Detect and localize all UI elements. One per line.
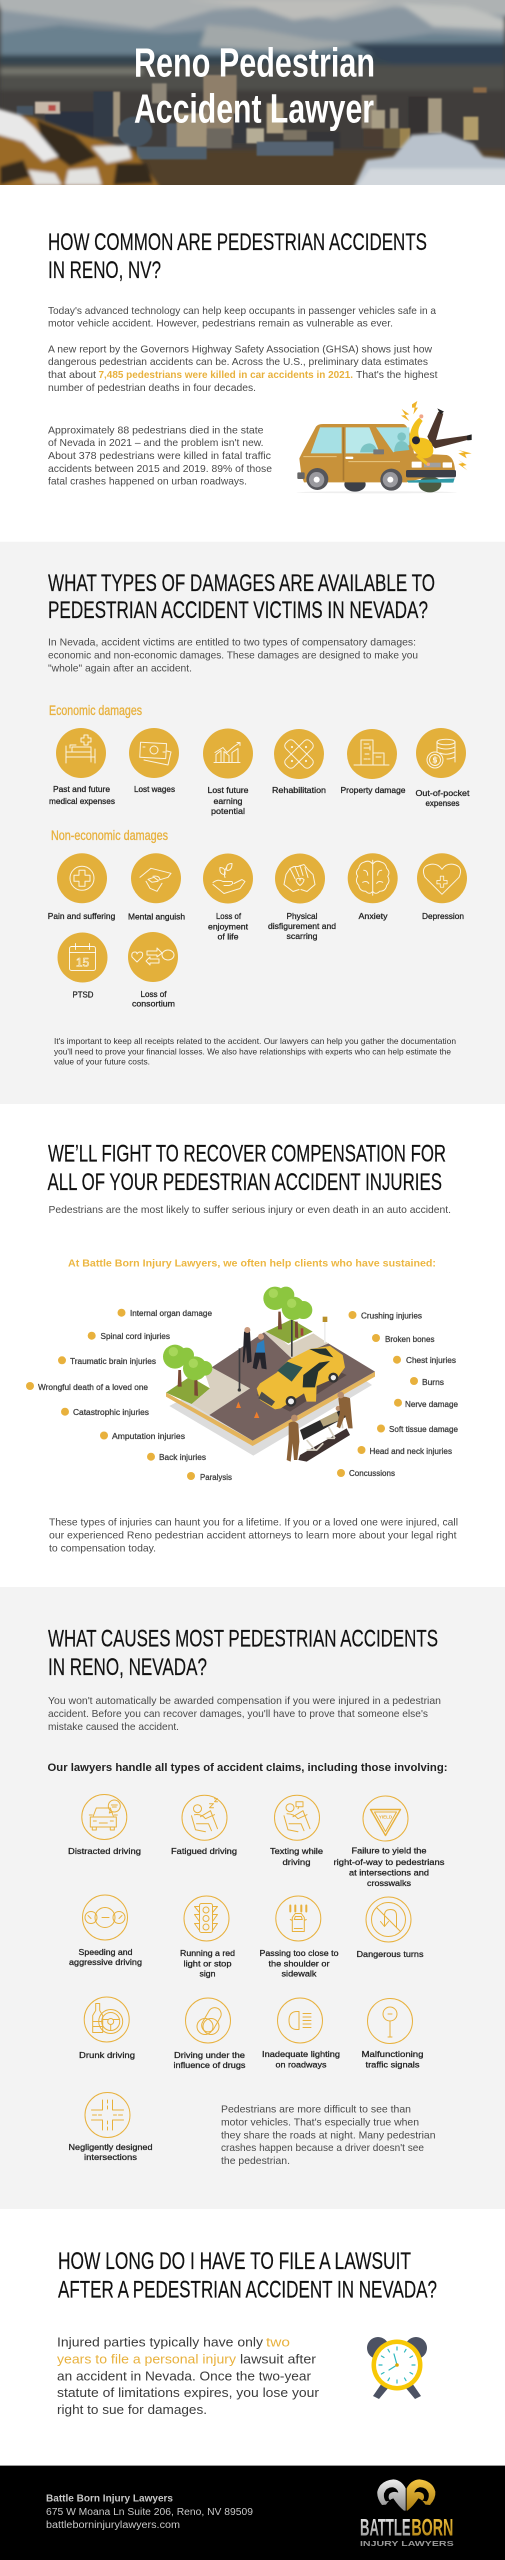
item: lost future earning potential: potential: [211, 807, 245, 816]
text block: intro: [48, 306, 436, 330]
text block: visibility note: they share the roads at night. Many pedestrian: [221, 2130, 436, 2142]
list: injuries left: Paralysis: [200, 1473, 232, 1482]
list: injuries right: Head and neck injuries: [370, 1447, 452, 1456]
text block: contact details: Battle Born Injury Lawyers: [46, 2494, 173, 2505]
text block: damages intro: economic and non-economic damages. These damages are designed to make you: [48, 650, 418, 662]
logo: Battle Born Injury Lawyers: BATTLE: [360, 2515, 411, 2542]
text block: statute of limitations: an accident in Nevada. Once the two-year: [57, 2368, 312, 2383]
item: physical disfigurement and scarring: disfigurement and: [268, 922, 336, 931]
item: mental anguish: Mental anguish: [128, 912, 185, 922]
panel: how common are pedestrian accidents: [48, 229, 472, 493]
item: speeding and aggressive driving: [69, 1895, 142, 1967]
text block: causes intro: [48, 1696, 441, 1733]
text block: intro: motor vehicle accident. However, pedestrians remain as vulnerable as ever.: [48, 319, 393, 330]
item: past and future medical expenses: medical expenses: [49, 797, 115, 806]
text block: injuries closing: to compensation today.: [49, 1544, 156, 1554]
panel: footer: [0, 2465, 505, 2560]
list: injuries right: Broken bones: [385, 1335, 434, 1344]
item: dangerous turns: Dangerous turns: [356, 1950, 424, 1959]
item: lost future earning potential: [203, 728, 253, 816]
text block: statute of limitations: right to sue for damages.: [57, 2402, 207, 2417]
item: running a red light: light or stop: [184, 1960, 232, 1968]
item: failure to yield: crosswalks: [367, 1879, 411, 1888]
text block: damages intro: In Nevada, accident victims are entitled to two types of compensatory damages:: [48, 638, 416, 649]
text block: Nevada statistics: [48, 425, 272, 488]
item: physical disfigurement and scarring: scarring: [286, 932, 318, 941]
heading: IN RENO, NV?: [48, 257, 161, 284]
logo: Battle Born Injury Lawyers: [360, 2479, 454, 2548]
item: mental anguish: [128, 853, 185, 922]
panel: hero photo banner: [0, 0, 505, 192]
item: lost wages: Lost wages: [134, 785, 175, 794]
list: injuries right: [337, 1311, 459, 1478]
panel: causes of accidents: [0, 1587, 505, 2209]
item: running a red light: sign: [200, 1970, 216, 1978]
text block: causes intro: You won't automatically be awarded compensation if you were injured in a pedestrian: [48, 1696, 441, 1707]
text block: damages intro: "whole" again after an accident.: [48, 664, 192, 674]
item: physical disfigurement and scarring: [268, 854, 336, 941]
heading: [48, 570, 435, 624]
list: injuries left: Back injuries: [159, 1453, 206, 1462]
item: inadequate lighting: Inadequate lighting: [262, 2050, 340, 2059]
list: injuries right: Crushing injuries: [361, 1312, 422, 1320]
item: loss of consortium: Loss of: [140, 990, 167, 999]
text block: Nevada statistics: Approximately 88 pedestrians died in the state: [48, 425, 264, 436]
item: lost future earning potential: Lost future: [208, 786, 249, 795]
item: driving under the influence of drugs: influence of drugs: [174, 2061, 246, 2070]
item: negligently designed intersections: [68, 2092, 153, 2162]
item: lost future earning potential: earning: [214, 797, 243, 806]
item: loss of enjoyment of life: Loss of: [216, 912, 242, 921]
item: driving under the influence of drugs: [174, 1998, 246, 2070]
item: property damage: Property damage: [340, 786, 406, 795]
text block: visibility note: the pedestrian.: [221, 2156, 290, 2167]
panel: filing deadline: [57, 2248, 437, 2417]
icon: alarm clock: [367, 2337, 427, 2399]
heading: [48, 1626, 438, 1681]
illustration: isometric accident scene: [163, 1287, 375, 1462]
item: passing too close: Passing too close to: [260, 1949, 339, 1958]
item: running a red light: Running a red: [180, 1949, 235, 1958]
text block: injuries closing: our experienced Reno pedestrian accident attorneys to learn more about your legal right: [49, 1530, 457, 1542]
text block: causes intro: accident. Before you can recover damages, you'll have to prove that someone else's: [48, 1709, 428, 1720]
text block: statute of limitations: years to file a personal injury: [57, 2352, 236, 2366]
text block: intro: Today's advanced technology can help keep occupants in passenger vehicles safe in a: [48, 306, 436, 317]
item: failure to yield: Failure to yield the: [352, 1847, 427, 1856]
item: passing too close: sidewalk: [282, 1970, 318, 1978]
icon grid: economic damages: [49, 728, 470, 816]
subheading: non-economic damages: Non-economic damages: [51, 828, 168, 843]
item: passing too close: the shoulder or: [268, 1960, 330, 1968]
text block: visibility note: [221, 2105, 436, 2167]
text block: statute of limitations: lawsuit after: [240, 2352, 317, 2366]
text block: damages intro: [48, 638, 418, 674]
item: pain and suffering: [48, 853, 116, 921]
item: out-of-pocket expenses: Out-of-pocket: [416, 789, 470, 798]
text block: injuries intro: Pedestrians are the most likely to suffer serious injury or even death in an auto accident.: [48, 1205, 451, 1216]
subheading: injuries sustained: At Battle Born Injury Lawyers, we often help clients who have sustained:: [68, 1258, 436, 1270]
item: passing too close: [260, 1896, 339, 1978]
item: inadequate lighting: [262, 1998, 340, 2070]
text block: GHSA report: dangerous pedestrian accidents can be. Across the U.S., preliminary data estimates: [48, 357, 428, 368]
text block: contact details: [46, 2494, 253, 2531]
item: driving under the influence of drugs: Driving under the: [174, 2051, 245, 2060]
item: anxiety: [348, 853, 398, 921]
list: injuries right: Nerve damage: [405, 1400, 459, 1409]
heading: IN RENO, NEVADA?: [48, 1654, 207, 1681]
title: [134, 40, 375, 132]
text block: GHSA report: That's the highest: [356, 370, 438, 381]
illustration: pedestrian hit by car: [297, 401, 472, 493]
list: injuries left: Amputation injuries: [112, 1432, 185, 1441]
text block: GHSA report: A new report by the Governors Highway Safety Association (GHSA) shows just how: [48, 344, 432, 355]
item: malfunctioning traffic signals: Malfunctioning: [362, 2050, 424, 2059]
item: failure to yield: [334, 1796, 444, 1888]
item: depression: Depression: [422, 912, 464, 921]
text block: injuries closing: These types of injuries can haunt you for a lifetime. If you or a loved one were injured, call: [49, 1518, 458, 1529]
title: Reno Pedestrian: [134, 40, 375, 86]
item: drunk driving: Drunk driving: [79, 2051, 136, 2060]
panel: types of damages: [0, 542, 505, 1104]
item: malfunctioning traffic signals: [362, 1998, 424, 2070]
item: distracted driving: Distracted driving: [68, 1847, 142, 1856]
icon grid: non-economic damages: [48, 853, 467, 1009]
text block: contact details: 675 W Moana Ln Suite 206, Reno, NV 89509: [46, 2507, 253, 2518]
item: pain and suffering: Pain and suffering: [48, 912, 116, 921]
item: rehabilitation: [272, 729, 326, 795]
item: depression: [417, 853, 467, 921]
item: past and future medical expenses: Past and future: [53, 785, 110, 794]
item: loss of enjoyment of life: of life: [218, 932, 239, 942]
text block: Nevada statistics: of Nevada in 2021 – and the problem isn't new.: [48, 438, 264, 449]
text block: causes intro: mistake caused the accident.: [48, 1722, 179, 1733]
item: loss of enjoyment of life: [203, 854, 253, 942]
logo: Battle Born Injury Lawyers: INJURY LAWYERS: [360, 2539, 454, 2548]
text block: injuries closing: [49, 1518, 458, 1554]
list: injuries left: [26, 1309, 232, 1482]
panel: injuries: [26, 1141, 459, 1554]
item: drunk driving: [79, 1997, 136, 2060]
item: PTSD: 15: [76, 956, 89, 970]
item: negligently designed intersections: Negligently designed: [68, 2143, 153, 2152]
item: texting while driving: [270, 1795, 324, 1867]
item: negligently designed intersections: intersections: [84, 2153, 137, 2162]
logo: Battle Born Injury Lawyers: BORN: [411, 2515, 453, 2542]
item: malfunctioning traffic signals: traffic signals: [366, 2060, 420, 2070]
text block: keep receipts note: value of your future costs.: [54, 1056, 150, 1066]
item: speeding and aggressive driving: Speeding and: [78, 1948, 133, 1957]
item: loss of consortium: [128, 932, 178, 1009]
item: fatigued driving: Fatigued driving: [171, 1847, 237, 1856]
icon grid: accident causes: [68, 1794, 444, 2162]
item: PTSD: PTSD: [72, 991, 94, 1000]
item: out-of-pocket expenses: expenses: [426, 799, 460, 808]
heading: [58, 2248, 437, 2304]
title: Accident Lawyer: [134, 86, 374, 132]
list: injuries left: Wrongful death of a loved one: [38, 1383, 149, 1392]
item: loss of consortium: consortium: [132, 1000, 175, 1009]
text block: statute of limitations: statute of limitations expires, you lose your: [57, 2385, 320, 2400]
text block: statute of limitations: Injured parties typically have only: [57, 2335, 263, 2350]
item: anxiety: Anxiety: [358, 912, 388, 921]
list: injuries right: Concussions: [349, 1469, 395, 1478]
list: injuries right: Burns: [422, 1378, 444, 1387]
text block: GHSA report: [48, 344, 438, 394]
item: dangerous turns: [356, 1897, 424, 1959]
item: physical disfigurement and scarring: Physical: [286, 912, 318, 921]
text block: GHSA report: number of pedestrian deaths in four decades.: [48, 383, 256, 394]
text block: GHSA report: that about: [48, 370, 96, 381]
subheading: economic damages: Economic damages: [49, 703, 142, 718]
photo: Reno skyline with snowy mountains: [0, 0, 505, 192]
item: distracted driving: [68, 1794, 142, 1856]
text block: visibility note: crashes happen because a driver doesn't see: [221, 2143, 424, 2154]
item: fatigued driving: [171, 1795, 237, 1856]
list: injuries left: Traumatic brain injuries: [70, 1357, 156, 1366]
text block: Nevada statistics: About 378 pedestrians were killed in fatal traffic: [48, 451, 271, 462]
list: injuries left: Spinal cord injuries: [100, 1332, 170, 1341]
text block: contact details: battleborninjurylawyers.com: [46, 2520, 180, 2531]
list: injuries left: Catastrophic injuries: [73, 1408, 149, 1417]
list: injuries right: Soft tissue damage: [389, 1425, 459, 1434]
text block: keep receipts note: you'll need to prove your financial losses. We also have relationships with experts who can help estimate the: [54, 1046, 451, 1056]
text block: visibility note: Pedestrians are more difficult to see than: [221, 2105, 411, 2116]
item: loss of enjoyment of life: enjoyment: [208, 922, 249, 932]
item: past and future medical expenses: [49, 728, 115, 806]
text block: Nevada statistics: fatal crashes happened on urban roadways.: [48, 477, 247, 488]
text block: visibility note: motor vehicles. That's especially true when: [221, 2118, 419, 2128]
list: injuries right: Chest injuries: [406, 1356, 456, 1365]
text block: keep receipts note: [54, 1036, 456, 1066]
item: texting while driving: Texting while: [270, 1847, 324, 1856]
text block: statute of limitations: two: [266, 2335, 290, 2350]
list: injuries left: Internal organ damage: [130, 1309, 213, 1318]
item: inadequate lighting: on roadways: [276, 2060, 326, 2070]
item: rehabilitation: Rehabilitation: [272, 786, 326, 795]
item: property damage: [340, 729, 406, 795]
item: speeding and aggressive driving: aggressive driving: [69, 1958, 142, 1967]
heading: [48, 229, 427, 284]
heading: [48, 1141, 446, 1196]
text block: keep receipts note: It's important to keep all receipts related to the accident. Our lawyers can help you gather the documentation: [54, 1036, 456, 1046]
text block: Nevada statistics: accidents between 2015 and 2019. 89% of those: [48, 464, 272, 475]
item: texting while driving: driving: [282, 1858, 311, 1867]
item: running a red light: [180, 1896, 235, 1978]
item: failure to yield: YIELD: [379, 1814, 393, 1820]
text block: statute of limitations: [57, 2335, 320, 2417]
item: failure to yield: right-of-way to pedestrians: [334, 1858, 444, 1867]
item: PTSD: [58, 932, 108, 1000]
subheading: accident claim types: Our lawyers handle all types of accident claims, including those involving:: [48, 1762, 447, 1774]
item: failure to yield: at intersections and: [349, 1868, 429, 1878]
item: lost wages: [129, 728, 179, 794]
text block: GHSA report: 7,485 pedestrians were killed in car accidents in 2021.: [98, 370, 353, 381]
item: out-of-pocket expenses: [416, 728, 470, 808]
